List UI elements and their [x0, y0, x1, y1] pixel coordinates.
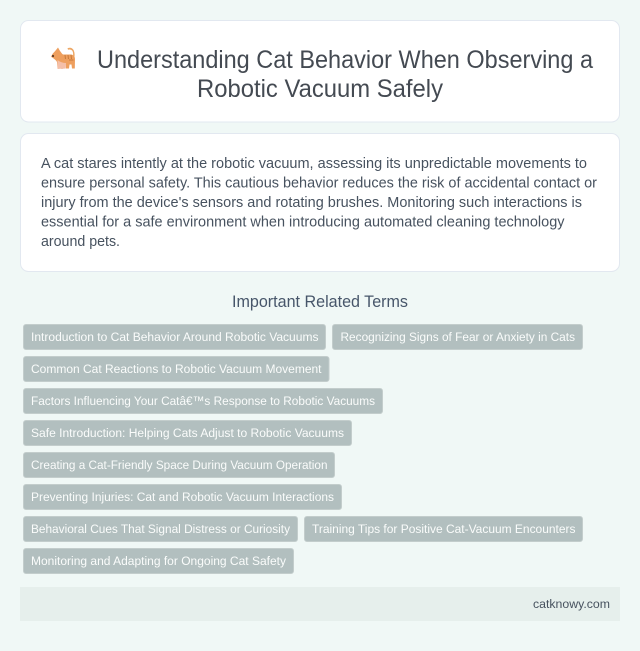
tag: Preventing Injuries: Cat and Robotic Vacuum Interactions — [31, 490, 334, 504]
tag list — [24, 324, 582, 574]
icon: cat — [51, 48, 75, 69]
tag: Behavioral Cues That Signal Distress or Curiosity — [31, 522, 291, 536]
tag: Safe Introduction: Helping Cats Adjust to Robotic Vacuums — [31, 426, 344, 440]
description text: A cat stares intently at the robotic vacuum, assessing its unpredictable movements to — [41, 156, 587, 172]
footer — [20, 587, 620, 621]
tag — [332, 324, 582, 350]
tag — [24, 452, 334, 478]
tag: Monitoring and Adapting for Ongoing Cat Safety — [31, 554, 287, 568]
description text — [41, 156, 597, 250]
tag — [24, 548, 294, 574]
tag — [24, 324, 326, 350]
tag: Common Cat Reactions to Robotic Vacuum Movement — [31, 362, 322, 376]
tag: Training Tips for Positive Cat-Vacuum Encounters — [312, 522, 576, 536]
tag — [24, 356, 329, 382]
title: Robotic Vacuum Safely — [197, 76, 444, 103]
description text: injury from the device's sensors and rotating brushes. Monitoring such interactions is — [41, 195, 582, 211]
description text: around pets. — [41, 234, 120, 250]
tag — [24, 420, 352, 446]
tag — [24, 484, 342, 510]
footer: catknowy.com — [533, 597, 610, 611]
tag — [24, 516, 298, 542]
description text: essential for a safe environment when introducing automated cleaning technology — [41, 214, 565, 230]
title — [97, 47, 593, 103]
heading: related terms: Important Related Terms — [232, 293, 408, 311]
tag: Introduction to Cat Behavior Around Robotic Vacuums — [31, 330, 318, 344]
panel: description card — [20, 134, 620, 272]
title: Understanding Cat Behavior When Observing a — [97, 47, 593, 74]
panel: title card — [20, 20, 620, 122]
description text: ensure personal safety. This cautious behavior reduces the risk of accidental contact or — [41, 176, 597, 192]
tag — [24, 388, 382, 414]
tag: Creating a Cat-Friendly Space During Vacuum Operation — [31, 458, 328, 472]
tag — [304, 516, 582, 542]
tag: Recognizing Signs of Fear or Anxiety in Cats — [340, 330, 575, 344]
tag: Factors Influencing Your Catâ€™s Response to Robotic Vacuums — [31, 394, 375, 408]
